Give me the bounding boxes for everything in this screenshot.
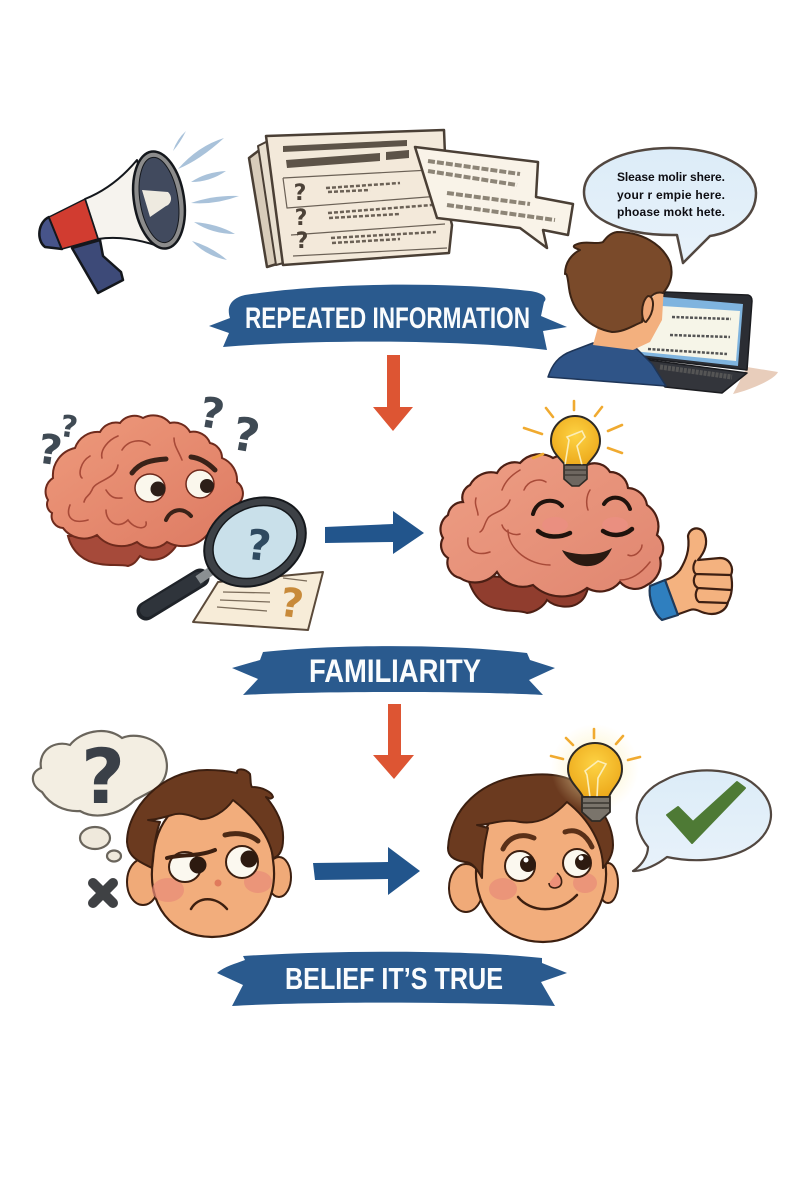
- callout: check mark bubble: [633, 770, 771, 871]
- arrow: red down 1: [373, 355, 413, 431]
- icon: doubtful face: [127, 769, 291, 937]
- icon: thought cloud with question: [33, 731, 167, 862]
- banner: repeated information: [209, 285, 567, 350]
- happy face eyes: [505, 851, 535, 881]
- megaphone rear cap: [39, 217, 62, 249]
- arrow: blue right 1: [325, 511, 424, 554]
- banner: belief it's true: BELIEF IT’S TRUE: [285, 961, 503, 996]
- banner: familiarity: [232, 646, 555, 695]
- happy brain cheeks: [542, 517, 568, 533]
- callout: oval speech bubble: [584, 148, 756, 263]
- icon: question marks around brain: [35, 387, 264, 475]
- banner: repeated information: REPEATED INFORMATION: [245, 302, 530, 335]
- icon: question marks around brain: ?: [58, 409, 80, 446]
- icon: question marks around brain: ?: [228, 406, 264, 464]
- happy face brows: [503, 836, 534, 849]
- speech bubble text: phoase mokt hete.: [617, 205, 725, 219]
- icon: laptop: [632, 292, 778, 394]
- happy brain folds: [468, 470, 650, 580]
- doubtful face head: [152, 795, 274, 937]
- icon: lightbulb on brain: [524, 401, 622, 486]
- icon: happy face: [448, 774, 618, 942]
- doubtful face hair: [127, 769, 283, 868]
- icon: sound rays: [173, 131, 239, 260]
- brain cerebellum: [68, 536, 180, 566]
- megaphone white cone: [85, 160, 158, 246]
- question marks on newspaper: ?: [294, 181, 306, 206]
- happy brain cerebellum: [467, 575, 590, 613]
- icon: lightbulb over head: [551, 724, 640, 821]
- icon: question marks around brain: ?: [196, 387, 228, 440]
- icon: question marks around brain: ?: [35, 425, 65, 475]
- happy face head: [476, 795, 606, 942]
- icon: thought cloud with question: ?: [81, 732, 125, 821]
- question marks on newspaper: [294, 181, 308, 254]
- doubtful face eyes: [169, 852, 201, 882]
- icon: magnifying glass: ?: [244, 520, 274, 571]
- green check mark: [667, 782, 745, 843]
- megaphone mouth: [127, 148, 191, 252]
- person hair: [565, 232, 672, 332]
- doubtful face brows: [167, 850, 215, 858]
- icon: X mark: [93, 883, 113, 903]
- laptop shadow: [733, 367, 778, 394]
- banner: familiarity: FAMILIARITY: [309, 653, 481, 689]
- icon: newspapers: [249, 130, 452, 267]
- banner: belief it's true: [217, 952, 567, 1006]
- person body: [548, 343, 666, 386]
- icon: confused brain: [46, 415, 243, 566]
- icon: paper with question mark: ?: [277, 580, 306, 628]
- shirt cuff: [650, 580, 678, 620]
- person neck and ear: [593, 285, 664, 350]
- brain body: [46, 415, 243, 548]
- icon: thumbs up hand: [650, 528, 732, 620]
- speech bubble text: [617, 170, 725, 219]
- question marks on newspaper: ?: [295, 206, 307, 231]
- icon: magnifying glass: [146, 480, 322, 611]
- speech bubble text: Slease molir shere.: [617, 170, 725, 184]
- brain face: [132, 459, 166, 473]
- doubtful face ears: [127, 859, 159, 905]
- person ear: [642, 296, 653, 322]
- question marks on newspaper: ?: [296, 229, 308, 254]
- speech bubble text: your r empie here.: [617, 188, 725, 202]
- brain folds: [69, 436, 182, 528]
- megaphone handle: [72, 240, 123, 293]
- happy face ears: [449, 864, 483, 912]
- icon: happy brain: [440, 454, 663, 613]
- happy brain face: [533, 501, 562, 514]
- icon: paper with question mark: [193, 572, 323, 630]
- happy face hair: [448, 774, 613, 878]
- callout: rectangular speech card: [415, 147, 573, 248]
- happy brain body: [440, 454, 663, 596]
- figure: person from behind: [548, 232, 672, 386]
- arrow: blue right 2: [313, 847, 420, 895]
- megaphone red band: [49, 199, 98, 249]
- arrow: red down 2: [373, 704, 414, 779]
- icon: megaphone: [39, 148, 191, 293]
